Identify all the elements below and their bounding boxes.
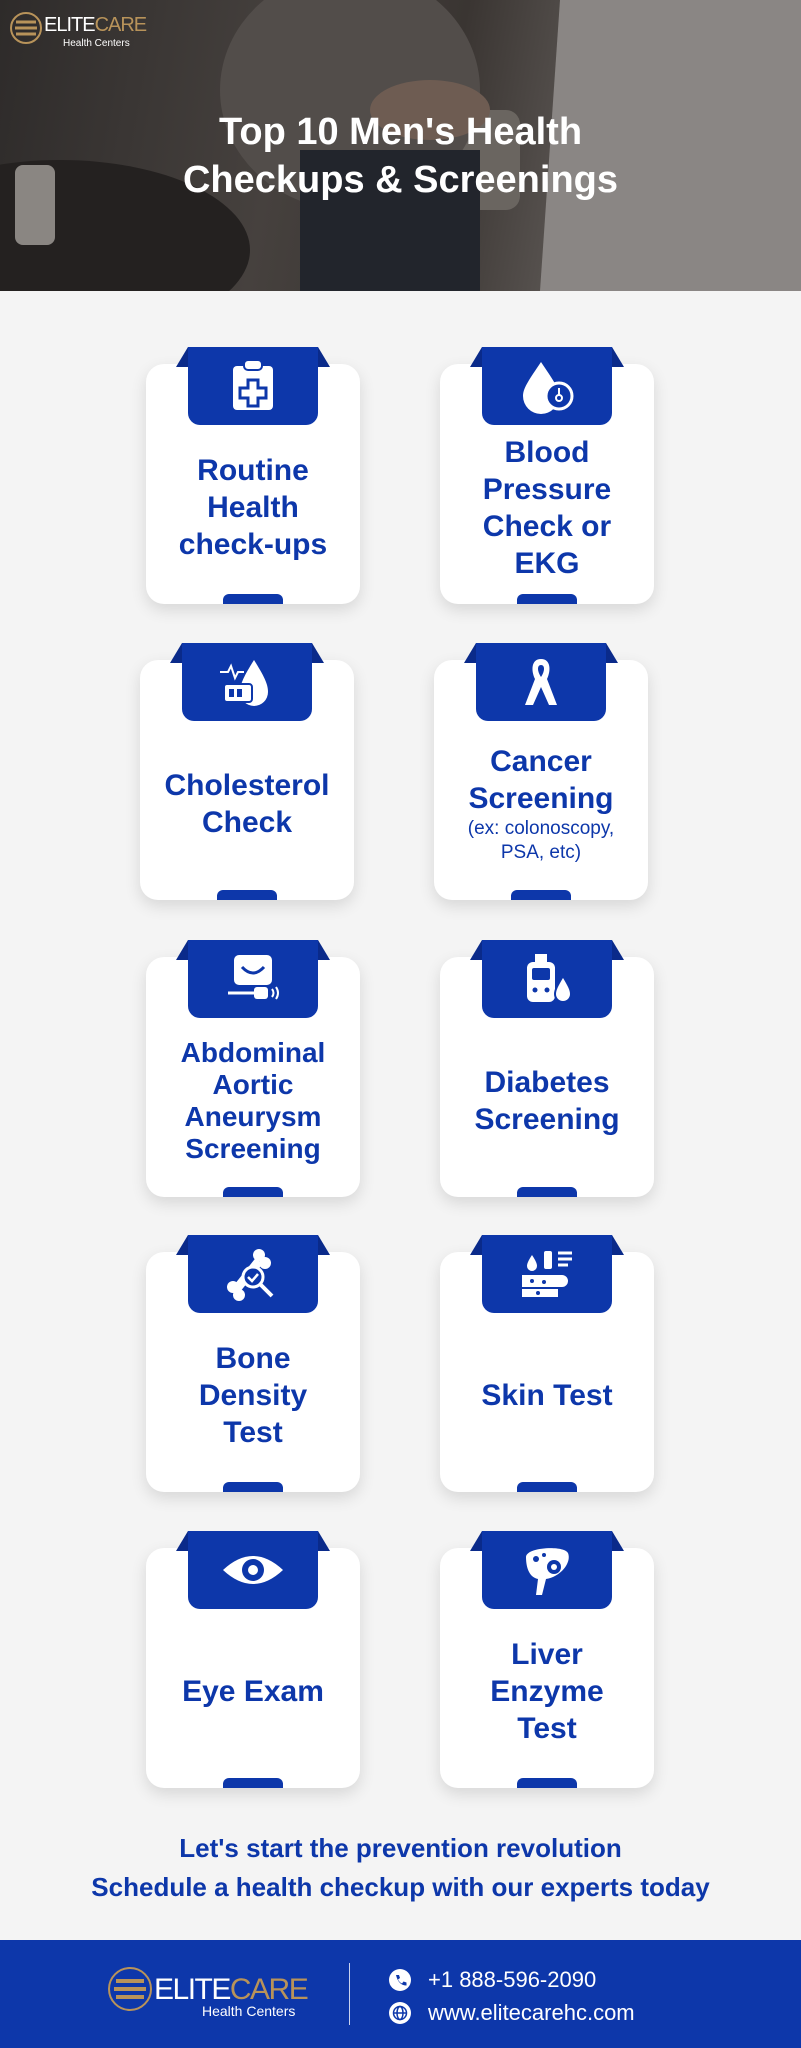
card: cancer screening: Screening: [468, 782, 614, 815]
logo: header: [10, 12, 146, 49]
call to action text: [91, 1833, 710, 1902]
card: cholesterol: Check: [202, 806, 292, 838]
card: AAA screening: Aneurysm: [185, 1100, 321, 1132]
card: routine health check-ups: check-ups: [179, 528, 327, 561]
card: skin test: [440, 1252, 654, 1492]
card: blood pressure: Check or: [483, 510, 611, 542]
card: AAA screening: [146, 957, 360, 1197]
card: diabetes: [440, 957, 654, 1197]
contact: website: www.elitecarehc.com: [428, 2000, 635, 2025]
icon: drop gauge: [482, 347, 612, 425]
card: cholesterol: Cholesterol: [164, 768, 330, 802]
card: cancer screening: PSA, etc): [501, 842, 581, 863]
title: Checkups & Screenings: [183, 159, 618, 201]
card: skin test: Skin Test: [481, 1379, 613, 1412]
card: blood pressure: [440, 364, 654, 604]
icon: clipboard: [188, 347, 318, 425]
card: routine health check-ups: Routine: [197, 454, 309, 487]
card: diabetes: Diabetes: [484, 1066, 610, 1098]
card: AAA screening: Screening: [185, 1132, 321, 1164]
card: cancer screening: (ex: colonoscopy,: [468, 818, 614, 839]
card: bone density: Test: [223, 1416, 283, 1449]
card: bone density: Density: [199, 1379, 307, 1412]
contact: phone: +1 888-596-2090: [428, 1967, 596, 1992]
card: cancer screening: Cancer: [490, 745, 592, 778]
icon: skin: [482, 1235, 612, 1313]
card: eye exam: Eye Exam: [182, 1675, 324, 1708]
card: bone density: [146, 1252, 360, 1492]
icon: ribbon: [476, 643, 606, 721]
icon: bone magnifier: [188, 1235, 318, 1313]
card: diabetes: Screening: [474, 1102, 620, 1136]
header photo banner: [0, 0, 801, 291]
title: Top 10 Men's Health: [219, 111, 582, 153]
icon: glucose meter: [482, 940, 612, 1018]
card: cholesterol: [140, 660, 354, 900]
icon: ultrasound: [188, 940, 318, 1018]
card: liver enzyme: Enzyme: [490, 1675, 604, 1708]
card: cancer screening: [434, 660, 648, 900]
logo: footer: Health Centers: [202, 2003, 295, 2019]
icon: eye: [188, 1531, 318, 1609]
call to action text: Schedule a health checkup with our experts today: [91, 1872, 710, 1902]
card: AAA screening: Abdominal: [181, 1036, 325, 1068]
logo: header: Health Centers: [63, 38, 130, 49]
title: [183, 111, 618, 201]
card: blood pressure: Pressure: [483, 472, 611, 506]
card: routine health check-ups: [146, 364, 360, 604]
logo: footer: ELITECARE: [154, 1973, 307, 2006]
card: liver enzyme: Test: [517, 1712, 577, 1745]
icon: cholesterol: [182, 643, 312, 721]
logo: footer: [108, 1967, 308, 2019]
card: eye exam: [146, 1548, 360, 1788]
footer: [0, 1940, 801, 2048]
card: AAA screening: Aortic: [213, 1068, 293, 1100]
card: bone density: Bone: [216, 1342, 290, 1375]
card: blood pressure: Blood: [504, 436, 589, 468]
card: liver enzyme: Liver: [511, 1638, 583, 1671]
card: liver enzyme: [440, 1548, 654, 1788]
card: blood pressure: EKG: [514, 546, 580, 580]
card: routine health check-ups: Health: [207, 491, 299, 524]
icon: liver: [482, 1531, 612, 1609]
logo: header: ELITECARE: [44, 14, 146, 36]
call to action text: Let's start the prevention revolution: [179, 1833, 622, 1863]
